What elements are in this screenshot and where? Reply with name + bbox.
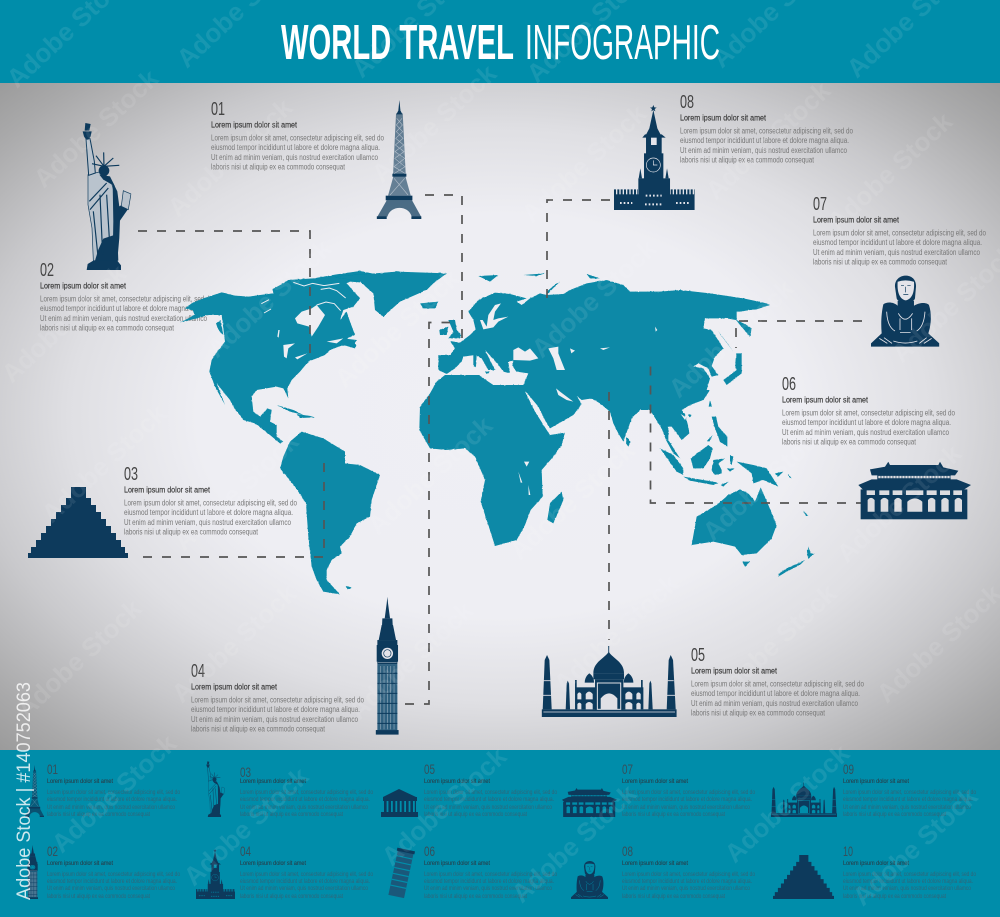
legend item 09: 09 <box>843 761 854 777</box>
text block 01: Ut enim ad minim veniam, quis nostrud exercitation ullamco <box>211 153 379 162</box>
icon: temple <box>858 462 971 519</box>
legend item 03: laboris nisi ut aliquip ex ea commodo consequat <box>240 811 343 818</box>
legend item 07: eiusmod tempor incididunt ut labore et dolore magna aliqua. <box>622 796 752 803</box>
legend item 06: laboris nisi ut aliquip ex ea commodo consequat <box>424 893 527 900</box>
map: Americas and Greenland <box>180 271 447 594</box>
legend item 01: Lorem ipsum dolor sit amet, consectetur adipiscing elit, sed do <box>47 789 180 796</box>
dashed connector: pyramid <box>143 460 324 557</box>
dashed connector: big ben <box>405 322 450 704</box>
watermark pattern: Adobe Stock <box>548 568 685 699</box>
legend item 04: Lorem ipsum dolor sit amet, consectetur adipiscing elit, sed do <box>240 871 373 878</box>
legend item 05: Lorem ipsum dolor sit amet, consectetur adipiscing elit, sed do <box>424 789 557 796</box>
text block 08 <box>680 92 854 164</box>
text block 06: Lorem ipsum dolor sit amet <box>782 394 868 404</box>
watermark pattern: Adobe Stock <box>504 435 641 566</box>
watermark pattern: Adobe Stock <box>329 263 466 394</box>
text block 05: Lorem ipsum dolor sit amet, consectetur adipiscing elit, sed do <box>691 680 865 688</box>
text block 01: Lorem ipsum dolor sit amet, consectetur adipiscing elit, sed do <box>211 134 385 142</box>
icon: buddha <box>871 276 939 347</box>
watermark pattern: Adobe Stock <box>847 781 984 912</box>
panel: main background <box>0 83 1000 750</box>
text block 04: 04 <box>191 661 205 681</box>
text block 08: Lorem ipsum dolor sit amet <box>680 112 766 122</box>
text block 04: eiusmod tempor incididunt ut labore et dolore magna aliqua. <box>191 705 360 714</box>
watermark pattern: Adobe Stock <box>11 593 148 724</box>
legend item 09: laboris nisi ut aliquip ex ea commodo consequat <box>843 811 946 818</box>
watermark pattern: Adobe Stock <box>166 578 303 709</box>
text block 08: Ut enim ad minim veniam, quis nostrud exercitation ullamco <box>680 146 848 155</box>
legend item 03: Lorem ipsum dolor sit amet, consectetur adipiscing elit, sed do <box>240 789 373 796</box>
legend item 09 <box>771 761 976 818</box>
panel: bottom legend band <box>0 750 1000 917</box>
icon: eiffel tower <box>377 100 421 219</box>
legend item 07: Ut enim ad minim veniam, quis nostrud exercitation ullamco <box>622 804 750 811</box>
icon: taj mahal small <box>771 782 837 817</box>
legend item 05 <box>381 761 557 818</box>
legend item 05: laboris nisi ut aliquip ex ea commodo consequat <box>424 811 527 818</box>
text block 01: eiusmod tempor incididunt ut labore et dolore magna aliqua. <box>211 143 380 152</box>
dashed connector: eiffel tower <box>425 195 462 342</box>
text block 01: Lorem ipsum dolor sit amet <box>211 120 297 130</box>
legend item 02: laboris nisi ut aliquip ex ea commodo consequat <box>47 893 150 900</box>
watermark: vertical stock id: Adobe Stock | #140752063 <box>14 682 35 900</box>
text block 05: laboris nisi ut aliquip ex ea commodo consequat <box>691 708 826 718</box>
text block 03: laboris nisi ut aliquip ex ea commodo consequat <box>124 528 259 536</box>
legend item 06: Ut enim ad minim veniam, quis nostrud exercitation ullamco <box>424 885 552 892</box>
legend item 08: Lorem ipsum dolor sit amet, consectetur adipiscing elit, sed do <box>622 871 755 878</box>
watermark pattern: Adobe Stock <box>700 75 837 206</box>
text block 03: Ut enim ad minim veniam, quis nostrud exercitation ullamco <box>124 518 292 527</box>
text block 04 <box>191 661 365 734</box>
legend item 08 <box>571 843 755 900</box>
text block 03: eiusmod tempor incididunt ut labore et dolore magna aliqua. <box>124 508 293 517</box>
legend item 10: laboris nisi ut aliquip ex ea commodo consequat <box>843 893 946 900</box>
watermark pattern: Adobe Stock <box>663 273 800 404</box>
watermark pattern: Adobe Stock <box>362 410 499 541</box>
panel: header bar <box>0 0 1000 83</box>
legend item 06: Lorem ipsum dolor sit amet <box>424 860 490 867</box>
text block 06: 06 <box>782 374 796 394</box>
legend item 01: Ut enim ad minim veniam, quis nostrud exercitation ullamco <box>47 804 175 811</box>
icon: temple small <box>562 788 617 817</box>
text block 05: 05 <box>691 645 705 665</box>
legend item 06: eiusmod tempor incididunt ut labore et dolore magna aliqua. <box>424 878 554 885</box>
legend item 03: Lorem ipsum dolor sit amet <box>240 778 306 785</box>
icon: step pyramid small <box>773 855 834 899</box>
text block 02: Lorem ipsum dolor sit amet, consectetur adipiscing elit, sed do <box>40 294 214 304</box>
watermark pattern: Adobe Stock <box>343 595 480 726</box>
icon: kremlin tower <box>614 105 695 210</box>
legend item 07: Lorem ipsum dolor sit amet, consectetur adipiscing elit, sed do <box>622 789 755 796</box>
legend item 01: Lorem ipsum dolor sit amet <box>47 778 113 785</box>
icon: kremlin tower small <box>196 849 235 899</box>
text block 06 <box>782 374 956 446</box>
icon: taj mahal <box>542 646 677 717</box>
icon: big ben <box>376 597 399 735</box>
dashed connector: buddha <box>736 321 862 348</box>
text block 04: laboris nisi ut aliquip ex ea commodo consequat <box>191 724 326 734</box>
watermark pattern: Adobe Stock <box>28 63 165 194</box>
text block 02: 02 <box>40 260 54 280</box>
watermark pattern: Adobe Stock <box>526 233 663 364</box>
watermark pattern: Adobe Stock <box>831 438 968 569</box>
legend item 04: 04 <box>240 843 251 859</box>
watermark pattern: Adobe Stock <box>719 738 856 869</box>
legend item 10 <box>773 843 976 900</box>
text block 05: Ut enim ad minim veniam, quis nostrud exercitation ullamco <box>691 699 859 708</box>
watermark pattern: Adobe Stock <box>178 761 315 892</box>
text block 03: Lorem ipsum dolor sit amet, consectetur adipiscing elit, sed do <box>124 498 298 508</box>
watermark pattern: Adobe Stock <box>706 578 843 709</box>
legend item 05: Lorem ipsum dolor sit amet <box>424 778 490 785</box>
watermark pattern: Adobe Stock <box>46 728 183 859</box>
title: INFOGRAPHIC <box>525 16 720 70</box>
watermark pattern: Adobe Stock <box>162 92 299 223</box>
legend item 02: eiusmod tempor incididunt ut labore et dolore magna aliqua. <box>47 878 177 885</box>
text block 04: Lorem ipsum dolor sit amet <box>191 682 277 692</box>
map: inland seas <box>261 282 688 495</box>
watermark pattern: Adobe Stock <box>366 58 503 189</box>
legend item 07: Lorem ipsum dolor sit amet <box>622 778 688 785</box>
text block 06: Ut enim ad minim veniam, quis nostrud exercitation ullamco <box>782 428 950 437</box>
text block 02: Lorem ipsum dolor sit amet <box>40 280 126 290</box>
text block 01: laboris nisi ut aliquip ex ea commodo consequat <box>211 162 346 172</box>
legend item 01: 01 <box>47 761 58 777</box>
world map <box>180 271 815 594</box>
watermark pattern: Adobe Stock <box>822 106 959 237</box>
icon: statue of liberty <box>83 123 131 270</box>
icon: statue of liberty small <box>206 761 225 817</box>
watermark pattern: Adobe Stock <box>506 778 643 909</box>
legend item 07 <box>562 761 755 818</box>
legend item 03 <box>206 761 373 818</box>
text block 04: Ut enim ad minim veniam, quis nostrud exercitation ullamco <box>191 715 359 724</box>
legend item 03: Ut enim ad minim veniam, quis nostrud exercitation ullamco <box>240 804 368 811</box>
legend item 03: eiusmod tempor incididunt ut labore et dolore magna aliqua. <box>240 796 370 803</box>
text block 07: Lorem ipsum dolor sit amet <box>813 214 899 224</box>
watermark pattern: Adobe Stock <box>376 741 513 872</box>
dashed connector: statue of liberty <box>138 231 310 353</box>
text block 08: 08 <box>680 92 694 112</box>
legend item 02: 02 <box>47 843 58 859</box>
text block 08: Lorem ipsum dolor sit amet, consectetur adipiscing elit, sed do <box>680 126 854 136</box>
text block 08: eiusmod tempor incididunt ut labore et dolore magna aliqua. <box>680 136 849 145</box>
icon: eiffel tower small <box>25 765 44 817</box>
dashed connector: kremlin <box>547 200 610 308</box>
legend item 06 <box>387 843 557 900</box>
text block 06: Lorem ipsum dolor sit amet, consectetur adipiscing elit, sed do <box>782 408 956 418</box>
legend item 03: 03 <box>240 764 251 780</box>
legend item 02 <box>27 843 180 900</box>
legend item 08: Ut enim ad minim veniam, quis nostrud exercitation ullamco <box>622 885 750 892</box>
legend item 09: Lorem ipsum dolor sit amet <box>843 778 909 785</box>
text block 02: eiusmod tempor incididunt ut labore et dolore magna aliqua. <box>40 304 209 313</box>
legend item 02: Ut enim ad minim veniam, quis nostrud exercitation ullamco <box>47 885 175 892</box>
text block 07 <box>813 194 987 266</box>
text block 02: Ut enim ad minim veniam, quis nostrud exercitation ullamco <box>40 314 208 323</box>
legend item 08: eiusmod tempor incididunt ut labore et dolore magna aliqua. <box>622 878 752 885</box>
watermark pattern: Adobe Stock <box>516 98 653 229</box>
text block 07: 07 <box>813 194 827 214</box>
legend item 04: Ut enim ad minim veniam, quis nostrud exercitation ullamco <box>240 885 368 892</box>
text block 05 <box>691 645 865 718</box>
text block 06: eiusmod tempor incididunt ut labore et dolore magna aliqua. <box>782 418 951 427</box>
legend item 04: eiusmod tempor incididunt ut labore et dolore magna aliqua. <box>240 878 370 885</box>
legend item 10: Lorem ipsum dolor sit amet <box>843 860 909 867</box>
legend item 05: Ut enim ad minim veniam, quis nostrud exercitation ullamco <box>424 804 552 811</box>
text block 05: Lorem ipsum dolor sit amet <box>691 666 777 676</box>
text block 02 <box>40 260 214 332</box>
legend item 05: eiusmod tempor incididunt ut labore et dolore magna aliqua. <box>424 796 554 803</box>
text block 02: laboris nisi ut aliquip ex ea commodo consequat <box>40 324 175 332</box>
legend item 07: laboris nisi ut aliquip ex ea commodo consequat <box>622 811 725 818</box>
title: WORLD TRAVEL <box>281 16 514 70</box>
dashed connector: taj mahal <box>608 392 610 640</box>
legend item 08: laboris nisi ut aliquip ex ea commodo consequat <box>622 893 725 900</box>
legend item 02: Lorem ipsum dolor sit amet, consectetur adipiscing elit, sed do <box>47 871 180 878</box>
legend item 05: 05 <box>424 761 435 777</box>
text block 03: 03 <box>124 464 138 484</box>
text block 03: Lorem ipsum dolor sit amet <box>124 484 210 494</box>
legend item 02: Lorem ipsum dolor sit amet <box>47 860 113 867</box>
icon: leaning tower small <box>387 848 415 898</box>
watermark pattern: Adobe Stock <box>201 233 338 364</box>
text block 08: laboris nisi ut aliquip ex ea commodo consequat <box>680 156 815 164</box>
legend item 04: laboris nisi ut aliquip ex ea commodo consequat <box>240 893 343 900</box>
icon: step pyramid <box>28 487 128 558</box>
legend item 01: laboris nisi ut aliquip ex ea commodo consequat <box>47 811 150 818</box>
text block 01: 01 <box>211 99 225 119</box>
legend item 08: 08 <box>622 843 633 859</box>
legend item 08: Lorem ipsum dolor sit amet <box>622 860 688 867</box>
icon: big ben small <box>27 845 38 899</box>
watermark pattern: Adobe Stock <box>697 416 834 547</box>
text block 04: Lorem ipsum dolor sit amet, consectetur adipiscing elit, sed do <box>191 696 365 704</box>
text block 05: eiusmod tempor incididunt ut labore et dolore magna aliqua. <box>691 689 860 698</box>
watermark pattern: Adobe Stock <box>36 398 173 529</box>
legend item 01 <box>25 761 180 818</box>
legend item 07: 07 <box>622 761 633 777</box>
text block 01 <box>211 99 385 172</box>
text block 06: laboris nisi ut aliquip ex ea commodo consequat <box>782 438 917 446</box>
legend item 06: Lorem ipsum dolor sit amet, consectetur adipiscing elit, sed do <box>424 871 557 878</box>
icon: buddha small <box>571 861 608 899</box>
legend item 10: 10 <box>843 843 853 859</box>
text block 03 <box>124 464 298 536</box>
map: Eurasia and Africa <box>419 273 815 577</box>
text block 07: laboris nisi ut aliquip ex ea commodo consequat <box>813 258 948 266</box>
legend item 04 <box>196 843 373 900</box>
watermark pattern: Adobe Stock <box>168 426 305 557</box>
dashed connector: temple <box>650 362 865 503</box>
legend item 06: 06 <box>424 843 435 859</box>
legend item 01: eiusmod tempor incididunt ut labore et dolore magna aliqua. <box>47 796 177 803</box>
legend item 04: Lorem ipsum dolor sit amet <box>240 860 306 867</box>
icon: parthenon small <box>381 789 418 817</box>
